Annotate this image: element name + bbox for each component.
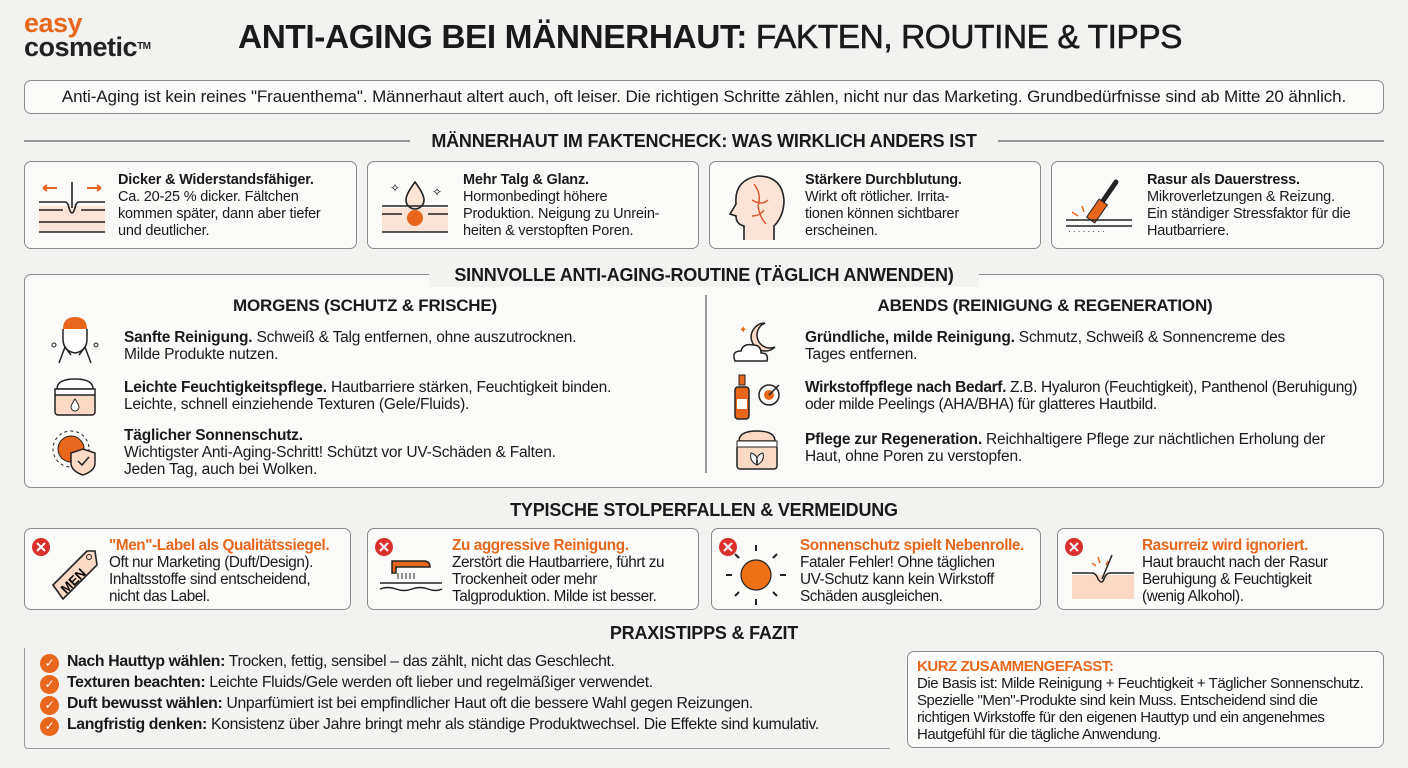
- card: talg: Hormonbedingt höhere: [463, 189, 607, 205]
- tip 1: Nach Hauttyp wählen: Trocken, fettig, sensibel – das zählt, nicht das Geschlecht.: [67, 653, 615, 670]
- card: sonnenschutz nebenrolle: Schäden ausgleichen.: [800, 588, 943, 605]
- text: regeneration: Pflege zur Regeneration. Reichhaltigere Pflege zur nächtlichen Erholung der: [805, 431, 1325, 448]
- logo: cosmeticTM: [24, 32, 151, 62]
- icon: face washing: [52, 317, 98, 364]
- heading: faktencheck: MÄNNERHAUT IM FAKTENCHECK: WAS WIRKLICH ANDERS IST: [431, 131, 977, 151]
- text: wirkstoffpflege: [805, 379, 1357, 413]
- text: regeneration: [805, 431, 1325, 465]
- text: sanfte reinigung: Sanfte Reinigung. Schweiß & Talg entfernen, ohne auszutrocknen.: [124, 329, 576, 346]
- card: rasurreiz: Beruhigung & Feuchtigkeit: [1142, 571, 1311, 588]
- card: rasurreiz: (wenig Alkohol).: [1142, 588, 1244, 605]
- title: ANTI-AGING BEI MÄNNERHAUT: FAKTEN, ROUTINE & TIPPS: [238, 19, 1182, 56]
- card: dicker: und deutlicher.: [118, 223, 209, 239]
- icon: razor: · · · · · · · ·: [1068, 227, 1105, 236]
- card: men label: "Men"-Label als Qualitätssiegel.: [109, 537, 329, 554]
- icon: cream jar: [54, 378, 96, 416]
- text: feuchtigkeitspflege: [124, 379, 611, 413]
- card: durchblutung: [709, 161, 1041, 249]
- text: gründliche reinigung: Tages entfernen.: [805, 346, 917, 363]
- icon: serum dropper: [734, 374, 780, 420]
- text: sonnenschutz: [124, 427, 556, 478]
- icon: men tag: [32, 538, 98, 600]
- tip 2: ✓: [45, 677, 54, 691]
- tip 2: Texturen beachten: Leichte Fluids/Gele werden oft lieber und regelmäßiger verwendet.: [67, 674, 653, 691]
- heading: abends: ABENDS (REINIGUNG & REGENERATION): [878, 296, 1212, 315]
- summary box: richtigen Wirkstoffe für den eigenen Hauttyp und ein angenehmes: [917, 709, 1324, 726]
- card: rasur: Mikroverletzungen & Reizung.: [1147, 189, 1335, 205]
- panel: routine: [24, 274, 1384, 488]
- icon: head veins: [728, 175, 785, 240]
- summary box: [907, 651, 1384, 748]
- card: rasurreiz: [1057, 528, 1384, 610]
- tip 4: ✓: [45, 719, 54, 733]
- card: men label: Oft nur Marketing (Duft/Design).: [109, 554, 313, 571]
- card: talg: Produktion. Neigung zu Unrein-: [463, 206, 659, 222]
- logo: easy: [24, 8, 82, 38]
- icon: moon cloud: [733, 322, 776, 362]
- text: regeneration: Haut, ohne Poren zu verstopfen.: [805, 448, 1022, 465]
- card: talg: Mehr Talg & Glanz.: [463, 172, 589, 188]
- card: talg: [367, 161, 699, 249]
- card: men label: [24, 528, 351, 610]
- heading: stolperfallen: TYPISCHE STOLPERFALLEN & VERMEIDUNG: [510, 500, 898, 520]
- card: rasur: Rasur als Dauerstress.: [1147, 172, 1300, 188]
- card: rasurreiz: Haut braucht nach der Rasur: [1142, 554, 1328, 571]
- icon: men tag: MEN: [58, 565, 89, 596]
- icon: moon cloud: ✦: [739, 325, 747, 336]
- icon: sun: [719, 538, 786, 605]
- icon: skin layers: [39, 182, 105, 233]
- card: durchblutung: Wirkt oft rötlicher. Irrita-: [805, 189, 949, 205]
- tip 1: ✓: [45, 656, 54, 670]
- text: feuchtigkeitspflege: Leichte Feuchtigkeitspflege. Hautbarriere stärken, Feuchtigkeit binden.: [124, 379, 611, 396]
- tips list: [24, 648, 890, 749]
- text: gründliche reinigung: [805, 329, 1285, 363]
- card: sonnenschutz nebenrolle: UV-Schutz kann kein Wirkstoff: [800, 571, 994, 588]
- icon: razor: [1066, 180, 1132, 236]
- icon: night cream: [736, 430, 778, 470]
- text: sanfte reinigung: Milde Produkte nutzen.: [124, 346, 278, 363]
- card: sonnenschutz nebenrolle: Sonnenschutz spielt Nebenrolle.: [800, 537, 1024, 554]
- card: sonnenschutz nebenrolle: Fataler Fehler! Ohne täglichen: [800, 554, 995, 571]
- card: aggressive reinigung: Trockenheit oder mehr: [452, 571, 597, 588]
- tip 3: Duft bewusst wählen: Unparfümiert ist bei empfindlicher Haut oft die bessere Wahl gegen Reizungen.: [67, 695, 753, 712]
- intro box: Anti-Aging ist kein reines "Frauenthema". Männerhaut altert auch, oft leiser. Die richtigen Schritte zählen, nicht nur das Marketing. Grundbedürfnisse sind ab Mitte 20 ähnlich.: [62, 87, 1346, 106]
- card: rasur: [1051, 161, 1384, 249]
- card: men label: Inhaltsstoffe sind entscheidend,: [109, 571, 310, 588]
- icon: sun shield: [52, 430, 96, 476]
- summary box: KURZ ZUSAMMENGEFASST:: [917, 658, 1113, 675]
- text: wirkstoffpflege: oder milde Peelings (AHA/BHA) für glatteres Hautbild.: [805, 396, 1157, 413]
- tip 4: Langfristig denken: Konsistenz über Jahre bringt mehr als ständige Produktwechsel. Die Effekte sind kumulativ.: [67, 716, 819, 733]
- text: gründliche reinigung: Gründliche, milde Reinigung. Schmutz, Schweiß & Sonnencreme des: [805, 329, 1285, 346]
- heading: praxistipps: PRAXISTIPPS & FAZIT: [610, 623, 798, 643]
- summary box: Die Basis ist: Milde Reinigung + Feuchtigkeit + Täglicher Sonnenschutz.: [917, 675, 1363, 692]
- intro box: [24, 80, 1384, 114]
- card: aggressive reinigung: [367, 528, 699, 610]
- text: wirkstoffpflege: Wirkstoffpflege nach Bedarf. Z.B. Hyaluron (Feuchtigkeit), Panthenol (Beruhigung): [805, 379, 1357, 396]
- card: dicker: [24, 161, 357, 249]
- icon: irritated skin: [1065, 538, 1134, 599]
- card: aggressive reinigung: Talgproduktion. Milde ist besser.: [452, 588, 656, 605]
- card: rasurreiz: Rasurreiz wird ignoriert.: [1142, 537, 1308, 554]
- card: durchblutung: tionen können sichtbarer: [805, 206, 959, 222]
- icon: brush: [375, 538, 442, 592]
- text: sonnenschutz: Jeden Tag, auch bei Wolken.: [124, 461, 317, 478]
- card: rasur: Hautbarriere.: [1147, 223, 1229, 239]
- text: sonnenschutz: Täglicher Sonnenschutz.: [124, 427, 303, 444]
- card: dicker: kommen später, dann aber tiefer: [118, 206, 321, 222]
- card: men label: nicht das Label.: [109, 588, 210, 605]
- card: dicker: Ca. 20-25 % dicker. Fältchen: [118, 189, 299, 205]
- card: sonnenschutz nebenrolle: [711, 528, 1041, 610]
- tip 3: ✓: [45, 698, 54, 712]
- logo: [24, 8, 151, 62]
- summary box: Spezielle "Men"-Produkte sind kein Muss. Entscheidend sind die: [917, 692, 1317, 709]
- card: durchblutung: Stärkere Durchblutung.: [805, 172, 962, 188]
- summary box: Hautgefühl für die tägliche Anwendung.: [917, 726, 1161, 743]
- card: dicker: Dicker & Widerstandsfähiger.: [118, 172, 314, 188]
- icon: oil drop: ✧: [390, 181, 400, 195]
- heading: morgens: MORGENS (SCHUTZ & FRISCHE): [233, 296, 497, 315]
- card: aggressive reinigung: Zu aggressive Reinigung.: [452, 537, 629, 554]
- icon: oil drop: [382, 180, 448, 233]
- card: aggressive reinigung: Zerstört die Hautbarriere, führt zu: [452, 554, 664, 571]
- icon: oil drop: ✧: [432, 185, 442, 199]
- text: feuchtigkeitspflege: Leichte, schnell einziehende Texturen (Gele/Fluids).: [124, 396, 469, 413]
- card: talg: heiten & verstopften Poren.: [463, 223, 633, 239]
- text: sanfte reinigung: [124, 329, 576, 363]
- text: sonnenschutz: Wichtigster Anti-Aging-Schritt! Schützt vor UV-Schäden & Falten.: [124, 444, 556, 461]
- card: rasur: Ein ständiger Stressfaktor für die: [1147, 206, 1351, 222]
- card: durchblutung: erscheinen.: [805, 223, 878, 239]
- heading: routine: SINNVOLLE ANTI-AGING-ROUTINE (TÄGLICH ANWENDEN): [454, 265, 954, 285]
